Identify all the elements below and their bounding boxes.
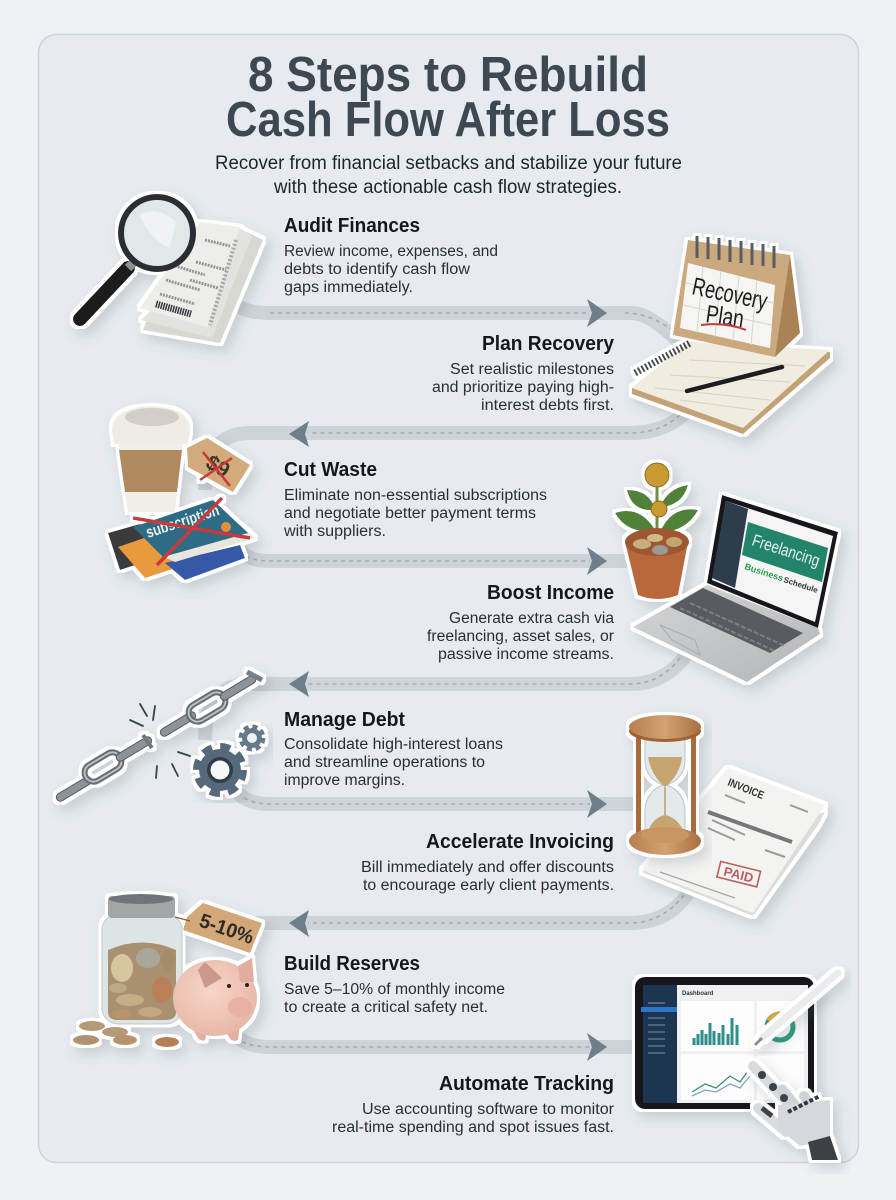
icon: laptop showing Freelancing: Freelancing	[750, 531, 822, 570]
step 4 text: Boost Income: Generate extra cash via	[449, 610, 614, 627]
icon: robot hand	[753, 1066, 838, 1160]
icon: invoice marked paid	[642, 768, 825, 916]
step 7 text: Build Reserves: Save 5–10% of monthly income	[284, 981, 505, 998]
icon: tablet dashboard	[635, 977, 814, 1109]
step 1 text: Audit Finances	[284, 214, 498, 296]
icon: recovery plan calendar and notebook: Plan	[704, 300, 746, 333]
icon: hourglass	[629, 715, 701, 855]
connector: step 4 to step 5	[205, 655, 686, 740]
connector: step 7 to step 8	[236, 1033, 636, 1061]
step 1 text: Audit Finances: gaps immediately.	[284, 279, 413, 296]
icon: coffee cup, price tag and subscription cards: $9	[202, 451, 234, 482]
icon: gears	[197, 727, 263, 793]
icon: stylus pen	[755, 973, 838, 1045]
connector: step 5 to step 6	[238, 790, 636, 818]
step 7 text: Build Reserves: Build Reserves	[284, 952, 420, 975]
step 8 text: Automate Tracking	[332, 1072, 614, 1136]
step 4 text: Boost Income	[427, 581, 614, 663]
step 7 text: Build Reserves: to create a critical safety net.	[284, 999, 488, 1016]
icon: laptop showing Freelancing	[633, 495, 838, 682]
subtitle	[215, 153, 682, 198]
connector: step 3 to step 4	[240, 547, 630, 575]
subtitle: with these actionable cash flow strategies.	[273, 177, 622, 198]
step 5 text: Manage Debt: improve margins.	[284, 772, 405, 789]
step 5 text: Manage Debt: Manage Debt	[284, 708, 405, 731]
step 2 text: Plan Recovery: Set realistic milestones	[450, 361, 614, 378]
icon: tablet dashboard: Dashboard	[682, 991, 714, 997]
step 6 text: Accelerate Invoicing: Bill immediately and offer discounts	[361, 859, 614, 876]
step 5 text: Manage Debt	[284, 708, 503, 789]
icon: invoice marked paid: INVOICE	[726, 777, 766, 802]
step 4 text: Boost Income: freelancing, asset sales, or	[427, 628, 614, 645]
step 3 text: Cut Waste	[283, 458, 547, 540]
icon: magnifying glass over receipts	[80, 197, 263, 343]
icon: recovery plan calendar and notebook	[632, 236, 830, 434]
connector: step 2 to step 3	[205, 412, 686, 490]
step 2 text: Plan Recovery: Plan Recovery	[482, 332, 615, 355]
step 6 text: Accelerate Invoicing	[361, 830, 614, 894]
step 1 text: Audit Finances: debts to identify cash flow	[284, 261, 471, 278]
step 2 text: Plan Recovery	[432, 332, 615, 414]
step 3 text: Cut Waste: with suppliers.	[283, 523, 386, 540]
icon: coin jar, tag and piggy bank	[73, 894, 262, 1047]
step 8 text: Automate Tracking: real-time spending and spot issues fast.	[332, 1119, 614, 1136]
step 3 text: Cut Waste: and negotiate better payment terms	[284, 505, 536, 522]
icon: recovery plan calendar and notebook: Recovery	[690, 272, 770, 316]
icon: laptop showing Freelancing: Business	[743, 561, 785, 583]
step 2 text: Plan Recovery: interest debts first.	[481, 397, 614, 414]
step 4 text: Boost Income: Boost Income	[487, 581, 614, 604]
title	[226, 48, 670, 147]
step 5 text: Manage Debt: Consolidate high-interest loans	[284, 736, 503, 753]
step 1 text: Audit Finances: Audit Finances	[284, 214, 420, 237]
step 8 text: Automate Tracking: Automate Tracking	[439, 1072, 614, 1095]
icon: impact sparks	[130, 704, 190, 778]
step 7 text: Build Reserves	[284, 952, 505, 1016]
subtitle: Recover from financial setbacks and stabilize your future	[215, 153, 682, 174]
icon: coffee cup, price tag and subscription cards	[108, 406, 255, 580]
step 3 text: Cut Waste: Eliminate non-essential subscriptions	[284, 487, 547, 504]
connector: step 6 to step 7	[255, 890, 690, 937]
step 6 text: Accelerate Invoicing: Accelerate Invoicing	[426, 830, 614, 853]
step 5 text: Manage Debt: and streamline operations to	[284, 754, 485, 771]
title: 8 Steps to Rebuild	[248, 48, 648, 102]
title: Cash Flow After Loss	[226, 93, 670, 147]
icon: laptop showing Freelancing: Schedule	[782, 575, 820, 595]
step 3 text: Cut Waste: Cut Waste	[284, 458, 377, 481]
connector: step 1 to step 2	[232, 299, 682, 345]
step 1 text: Audit Finances: Review income, expenses, and	[284, 243, 498, 260]
icon: invoice marked paid: PAID	[722, 864, 755, 886]
icon: coin jar, tag and piggy bank: 5-10%	[196, 910, 257, 949]
step 2 text: Plan Recovery: and prioritize paying high-	[432, 379, 614, 396]
icon: coin plant in pot	[615, 463, 698, 599]
step 6 text: Accelerate Invoicing: to encourage early client payments.	[363, 877, 614, 894]
icon: coffee cup, price tag and subscription cards: subscription	[144, 502, 222, 542]
icon: broken chain	[55, 672, 262, 803]
step 8 text: Automate Tracking: Use accounting software to monitor	[362, 1101, 614, 1118]
step 4 text: Boost Income: passive income streams.	[438, 646, 614, 663]
